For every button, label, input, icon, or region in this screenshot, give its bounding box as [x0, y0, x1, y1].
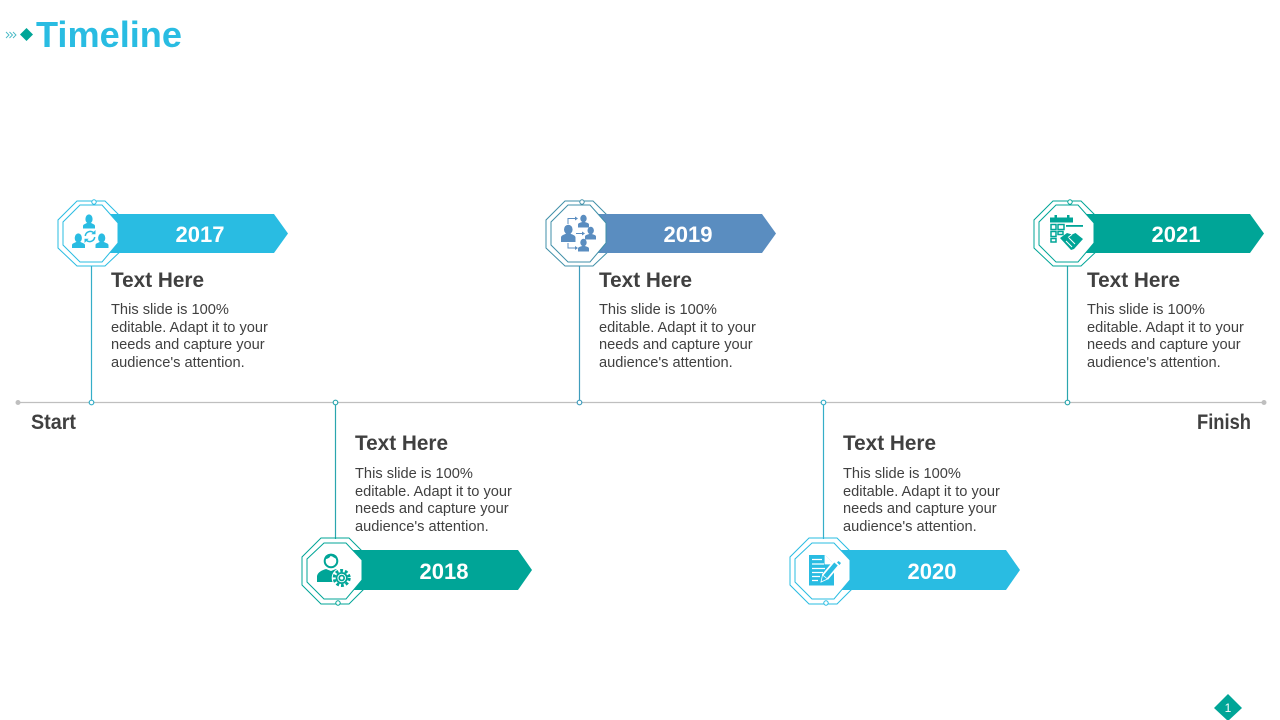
icon: user gear — [307, 543, 362, 599]
text block — [355, 432, 512, 535]
text block: This slide is 100% — [355, 466, 473, 482]
timeline axis — [16, 400, 1266, 405]
text block — [1087, 269, 1244, 371]
text block: editable. Adapt it to your — [843, 484, 1000, 500]
octagon frame — [302, 538, 368, 605]
milestone 2019 — [546, 200, 776, 405]
text block: editable. Adapt it to your — [599, 320, 756, 336]
text block: Text Here — [111, 269, 204, 292]
label: finish: Finish — [1197, 411, 1251, 434]
icon: calendar handshake — [1039, 205, 1094, 262]
text block: Text Here — [355, 432, 448, 455]
milestone 2021 — [1034, 200, 1264, 405]
text block: audience's attention. — [111, 355, 245, 371]
text block: audience's attention. — [355, 519, 489, 535]
icon: team refresh — [63, 205, 118, 262]
text block: audience's attention. — [599, 355, 733, 371]
label: start: Start — [31, 411, 76, 434]
icon: chevrons — [6, 32, 16, 38]
text block: This slide is 100% — [111, 302, 229, 318]
page number badge: 1 — [1225, 701, 1232, 715]
year banner: 2019 — [664, 222, 712, 247]
text block: Text Here — [1087, 269, 1180, 292]
year banner: 2018 — [420, 559, 468, 584]
text block: audience's attention. — [1087, 355, 1221, 371]
year banner: 2021 — [1152, 222, 1200, 247]
text block: Text Here — [599, 269, 692, 292]
text block: This slide is 100% — [599, 302, 717, 318]
text block: needs and capture your — [599, 337, 753, 353]
text block — [111, 269, 268, 371]
milestone 2020 — [790, 400, 1020, 605]
text block: audience's attention. — [843, 519, 977, 535]
title text: Timeline — [36, 14, 182, 55]
milestone 2017 — [58, 200, 288, 405]
page number badge — [1214, 694, 1242, 720]
text block — [843, 432, 1000, 535]
text block: needs and capture your — [1087, 337, 1241, 353]
octagon frame — [58, 200, 124, 266]
year banner — [344, 550, 532, 590]
connector — [89, 266, 94, 405]
year banner — [832, 550, 1020, 590]
connector — [577, 266, 582, 405]
text block: This slide is 100% — [843, 466, 961, 482]
octagon frame — [1034, 200, 1100, 266]
connector — [333, 400, 338, 539]
text block: editable. Adapt it to your — [111, 320, 268, 336]
connector — [1065, 266, 1070, 405]
text block: This slide is 100% — [1087, 302, 1205, 318]
text block: needs and capture your — [111, 337, 265, 353]
milestone 2018 — [302, 400, 532, 605]
year banner — [1076, 214, 1264, 253]
text block: Text Here — [843, 432, 936, 455]
icon: document and pencil — [795, 543, 850, 599]
text block: editable. Adapt it to your — [355, 484, 512, 500]
year banner: 2020 — [908, 559, 956, 584]
year banner — [100, 214, 288, 253]
text block: needs and capture your — [843, 501, 997, 517]
text block: editable. Adapt it to your — [1087, 320, 1244, 336]
connector — [821, 400, 826, 539]
text block: needs and capture your — [355, 501, 509, 517]
octagon frame — [546, 200, 612, 266]
year banner — [588, 214, 776, 253]
icon: title diamond — [20, 28, 33, 41]
title — [6, 14, 182, 55]
text block — [599, 269, 756, 371]
icon: people flow — [551, 205, 606, 262]
octagon frame — [790, 538, 856, 605]
year banner: 2017 — [176, 222, 224, 247]
